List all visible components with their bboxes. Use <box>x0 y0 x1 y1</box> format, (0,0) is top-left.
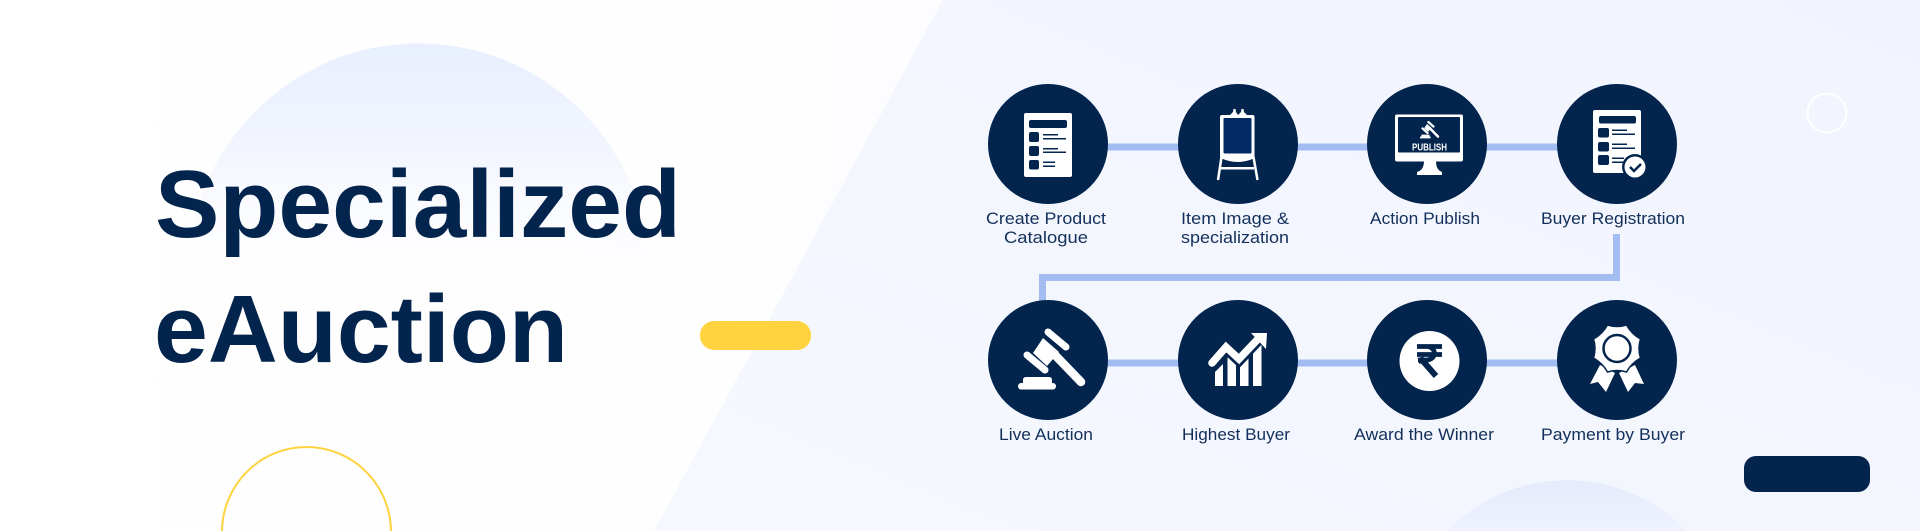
label: Catalogue <box>1004 229 1088 247</box>
label: Item Image & <box>1181 210 1289 228</box>
label: Live Auction <box>999 426 1093 444</box>
decorative white ring <box>1808 94 1846 132</box>
step: Item Image and specialization <box>1178 84 1298 247</box>
label: Create Product <box>986 210 1106 228</box>
decorative yellow pill <box>700 321 811 350</box>
label: Highest Buyer <box>1182 426 1291 444</box>
icon: document list <box>1024 113 1072 177</box>
step: Highest Buyer <box>1178 300 1298 444</box>
label: Action Publish <box>1370 210 1480 228</box>
step: Create Product Catalogue <box>986 84 1108 247</box>
step: Payment by Buyer <box>1541 300 1686 444</box>
label <box>1181 210 1289 247</box>
step: Buyer Registration <box>1541 84 1685 228</box>
icon: document with check <box>1593 110 1648 180</box>
icon: easel <box>1218 109 1258 180</box>
icon: gavel <box>1018 332 1081 390</box>
decorative bottom circle <box>1447 480 1687 531</box>
label: Award the Winner <box>1354 426 1495 444</box>
step: Live Auction <box>988 300 1108 444</box>
label: Buyer Registration <box>1541 210 1685 228</box>
icon: monitor with gavel <box>1395 114 1463 175</box>
icon: monitor with gavel: PUBLISH <box>1412 142 1447 154</box>
step: Award the Winner <box>1354 300 1495 444</box>
decorative yellow arc <box>222 447 391 531</box>
decorative navy pill <box>1744 456 1870 492</box>
diagonal background panel <box>654 0 1920 531</box>
step: Action Publish <box>1367 84 1487 228</box>
title <box>154 151 681 383</box>
title: eAuction <box>154 276 568 383</box>
title: Specialized <box>155 151 681 258</box>
connector lines <box>1039 144 1620 366</box>
label <box>986 210 1106 247</box>
label: specialization <box>1181 229 1289 247</box>
icon: rupee coin <box>1400 331 1460 391</box>
icon: award rosette <box>1590 325 1644 392</box>
icon: rising chart <box>1212 333 1267 386</box>
label: Payment by Buyer <box>1541 426 1686 444</box>
decorative large faded circle <box>188 44 649 274</box>
